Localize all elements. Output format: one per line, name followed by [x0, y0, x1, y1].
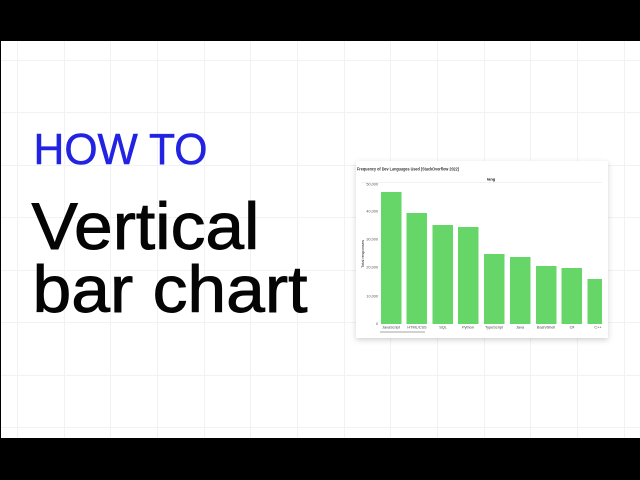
title: vertical bar chart: Vertical	[32, 189, 260, 263]
panel: bar chart card	[356, 161, 608, 338]
y axis labels: 40,000	[366, 210, 378, 214]
y axis labels: 30,000	[366, 238, 378, 242]
y axis labels: 20,000	[366, 266, 378, 270]
y axis labels: 0	[376, 322, 378, 326]
x axis labels: C++	[594, 326, 602, 330]
y axis labels	[366, 182, 378, 326]
x axis labels: HTML/CSS	[407, 326, 427, 330]
chart title: Frequency of Dev Languages Used (StackOverflow 2022)	[357, 166, 459, 172]
title: vertical bar chart: bar chart	[32, 252, 308, 326]
heading: how to: HOW TO	[34, 125, 208, 174]
x axis labels	[382, 326, 602, 330]
x axis labels: Java	[516, 326, 525, 330]
y axis labels: 10,000	[366, 294, 378, 298]
facet header: lang: lang	[487, 176, 496, 182]
x axis labels: JavaScript	[382, 326, 401, 330]
y axis title: Total responses	[360, 240, 365, 268]
bars	[381, 192, 602, 324]
x axis labels: C#	[570, 326, 575, 330]
x axis labels: Bash/Shell	[537, 326, 555, 330]
x axis labels: TypeScript	[485, 326, 504, 330]
y axis labels: 50,000	[366, 182, 378, 186]
x axis labels: SQL	[439, 326, 447, 330]
title: vertical bar chart	[32, 189, 308, 326]
x axis labels: Python	[462, 326, 474, 330]
scroll indicator line	[380, 331, 425, 333]
